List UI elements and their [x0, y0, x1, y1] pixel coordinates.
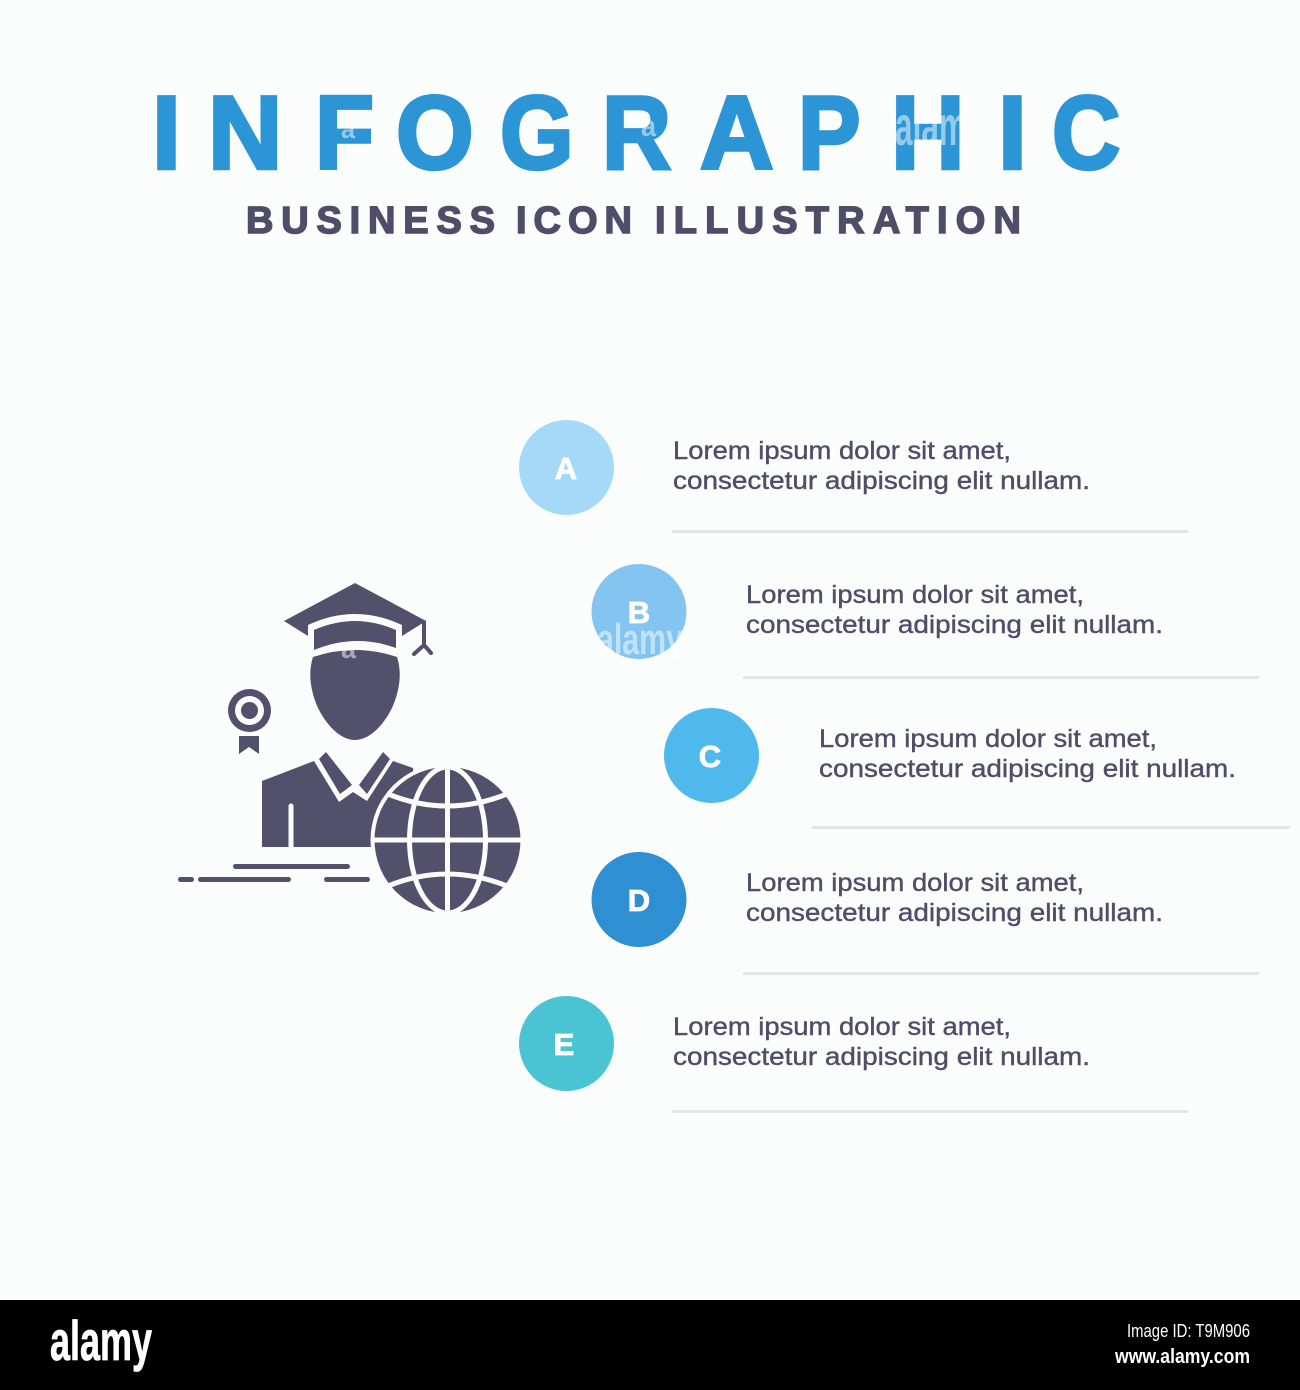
- letter E: E: [554, 1027, 574, 1062]
- title: A: [700, 75, 774, 191]
- title: N: [208, 74, 282, 191]
- watermarks: [341, 94, 967, 665]
- title: C: [1052, 75, 1120, 192]
- text A: [673, 437, 1090, 495]
- step D: [592, 852, 1259, 975]
- text D: consectetur adipiscing elit nullam.: [746, 899, 1163, 927]
- subtitle: ICON: [516, 200, 632, 242]
- website: www.alamy.com: [1114, 1346, 1250, 1368]
- watermarks: a: [341, 114, 356, 144]
- text C: [819, 725, 1236, 783]
- watermarks: a: [641, 110, 656, 143]
- title: P: [798, 74, 860, 191]
- circle B: [592, 564, 686, 659]
- title: O: [396, 75, 474, 191]
- title: I: [152, 76, 181, 192]
- icon: shoulders and collar: [262, 752, 420, 847]
- subtitle: BUSINESS: [246, 200, 495, 242]
- icon: head: [310, 650, 400, 740]
- title: G: [500, 75, 574, 192]
- icon: globe: [370, 763, 524, 917]
- title: R: [602, 76, 671, 191]
- step B: [592, 564, 1259, 679]
- text A: consectetur adipiscing elit nullam.: [673, 467, 1090, 495]
- icon: mortarboard cap: [284, 583, 431, 654]
- title: [152, 74, 1120, 192]
- text E: Lorem ipsum dolor sit amet,: [673, 1013, 1011, 1041]
- footer logo: alamy: [50, 1309, 152, 1372]
- icon: medal: [228, 689, 271, 754]
- step E: [519, 996, 1188, 1113]
- letter B: B: [628, 595, 650, 630]
- title: H: [891, 75, 965, 191]
- text A: Lorem ipsum dolor sit amet,: [673, 437, 1011, 465]
- text D: [746, 869, 1163, 927]
- title: I: [998, 76, 1027, 192]
- footer bar: [0, 1300, 1300, 1390]
- icon: ground lines: [178, 864, 370, 882]
- watermarks: a: [341, 632, 356, 665]
- watermarks: alam: [895, 94, 967, 157]
- text B: [746, 581, 1163, 639]
- text B: Lorem ipsum dolor sit amet,: [746, 581, 1084, 609]
- letter D: D: [628, 883, 650, 918]
- title: F: [315, 75, 374, 191]
- icon: graduate with globe: [178, 583, 524, 917]
- text E: [673, 1013, 1090, 1071]
- text B: consectetur adipiscing elit nullam.: [746, 611, 1163, 639]
- text C: Lorem ipsum dolor sit amet,: [819, 725, 1157, 753]
- letter A: A: [555, 451, 577, 486]
- image id: Image ID: T9M906: [1127, 1321, 1250, 1341]
- circle C: [664, 708, 759, 803]
- circle E: [519, 996, 614, 1091]
- subtitle: [246, 200, 1021, 242]
- watermarks: alamy: [597, 615, 683, 664]
- text E: consectetur adipiscing elit nullam.: [673, 1043, 1090, 1071]
- text C: consectetur adipiscing elit nullam.: [819, 755, 1236, 783]
- text D: Lorem ipsum dolor sit amet,: [746, 869, 1084, 897]
- step C: [664, 708, 1290, 829]
- circle A: [519, 420, 614, 515]
- subtitle: ILLUSTRATION: [655, 200, 1021, 242]
- letter C: C: [699, 739, 721, 774]
- step A: [519, 420, 1188, 533]
- circle D: [592, 852, 686, 947]
